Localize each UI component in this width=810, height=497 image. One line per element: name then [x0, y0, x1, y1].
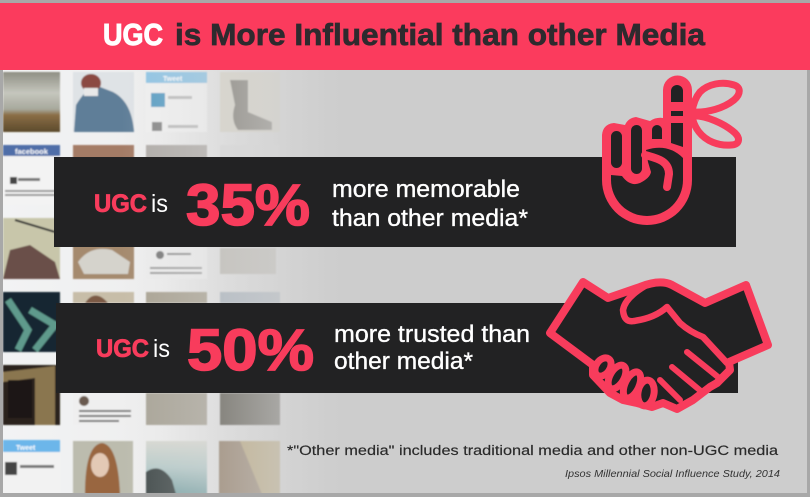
- panel: 35% more memorable: [54, 157, 736, 247]
- row 6 tiles: Tweet: [16, 445, 36, 452]
- description 1: more memorable: [332, 176, 520, 203]
- black bar 1: [54, 157, 736, 247]
- finger openings: [611, 85, 683, 216]
- row 2 tiles: [3, 145, 280, 205]
- label: UGC is: UGC: [94, 190, 147, 218]
- title text: is More Influential than other Media: [175, 17, 706, 52]
- ribbon loops: [692, 83, 739, 145]
- row 5 tiles: [3, 365, 280, 425]
- row 4 tiles: [3, 292, 280, 352]
- label: UGC is: is: [151, 190, 168, 218]
- panel: 50% more trusted: [56, 303, 738, 393]
- row 2 tiles: facebook: [15, 147, 49, 156]
- description 2: other media*: [334, 348, 473, 375]
- photo wall of user generated content: [3, 72, 280, 494]
- stat: 35%: 35%: [186, 173, 310, 238]
- thumb line: [645, 155, 669, 187]
- row 6 tiles: [3, 440, 280, 494]
- description 2: more trusted than: [334, 321, 530, 348]
- label: UGC is: is: [153, 335, 170, 363]
- black bar 2: [56, 303, 738, 393]
- clasp line: [623, 286, 727, 363]
- row 1 tiles: [3, 72, 280, 132]
- row 1 tiles: Tweet: [163, 76, 183, 83]
- icon: handshake: [550, 282, 768, 409]
- knuckles: [592, 355, 656, 407]
- title banner: [0, 0, 810, 70]
- description 1: than other media*: [332, 205, 528, 232]
- stat: 50%: 50%: [187, 318, 314, 383]
- title text: UGC: [103, 17, 163, 52]
- label: UGC is: UGC: [96, 335, 149, 363]
- row 3 tiles: [3, 218, 276, 279]
- icon: finger with tied ribbon: [602, 76, 739, 225]
- finger lines: [660, 352, 718, 400]
- hand silhouette: [602, 76, 692, 225]
- hands outline: [550, 282, 768, 409]
- source citation: Ipsos Millennial Social Influence Study, 2014: [565, 468, 780, 480]
- footnote: *"Other media" includes traditional media and other non-UGC media: [287, 443, 779, 458]
